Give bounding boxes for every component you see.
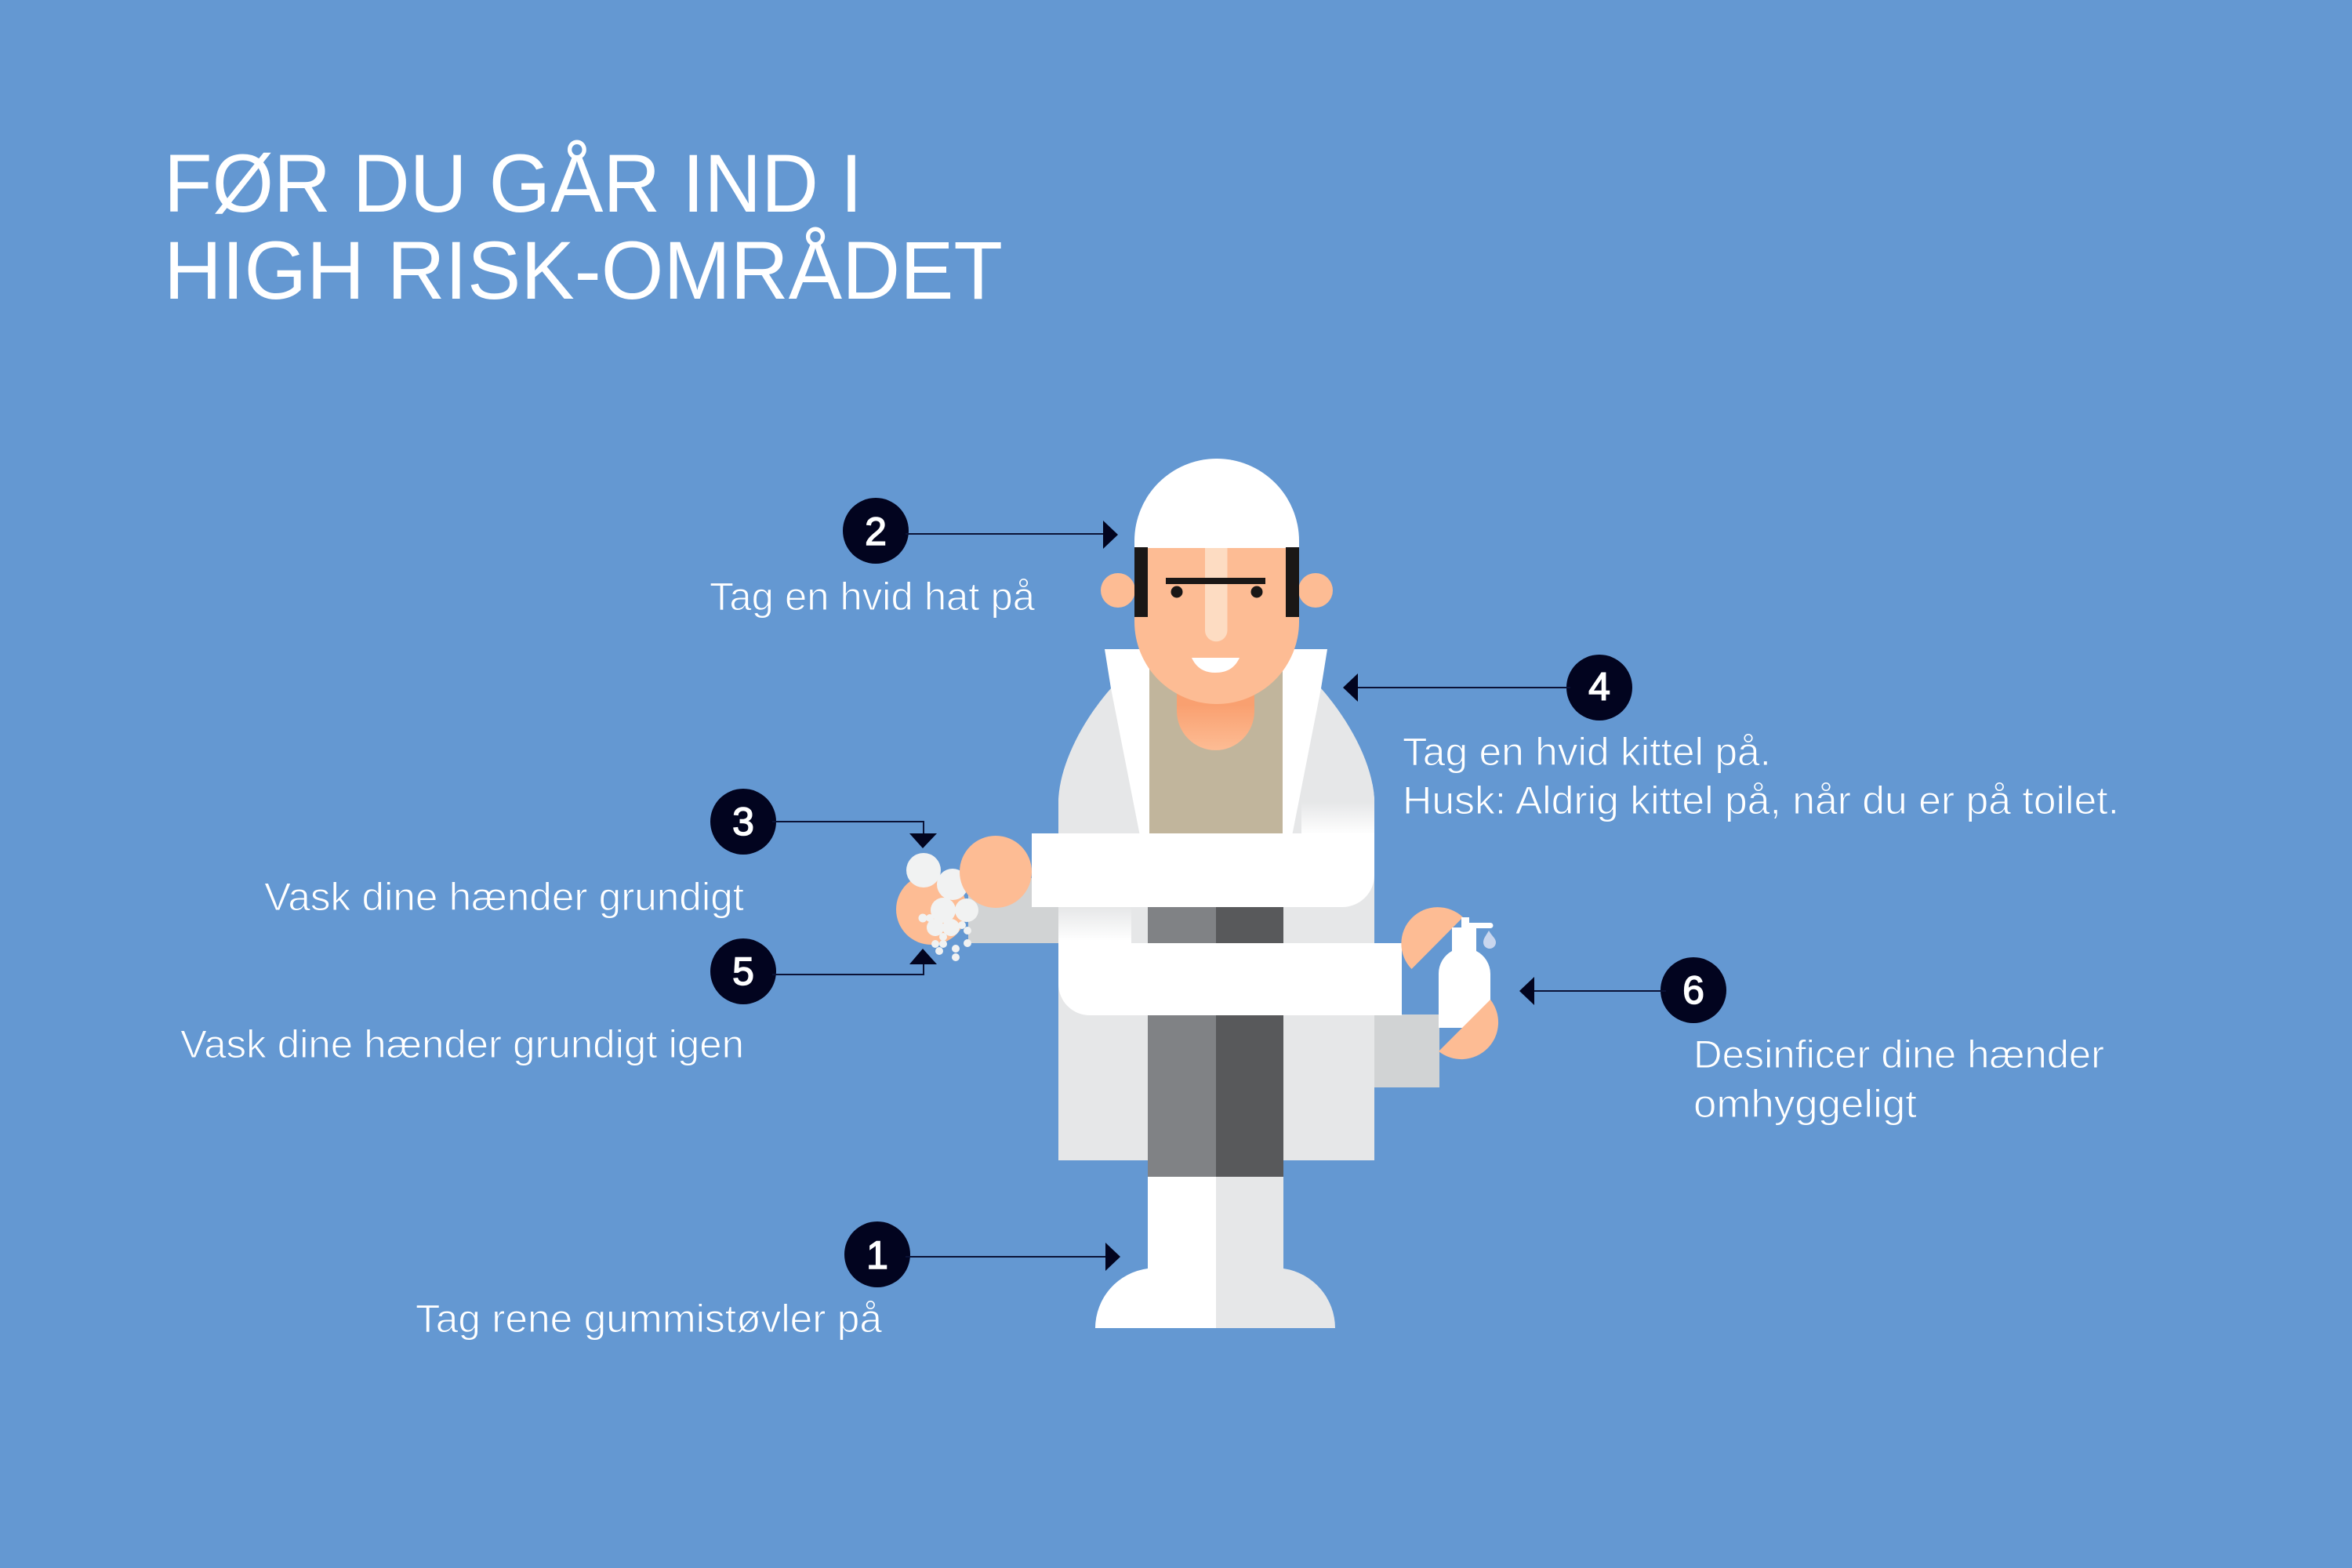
coat highlight between arms: [1058, 907, 1131, 945]
right sleeve: [1374, 1014, 1439, 1087]
smile: [1192, 658, 1240, 673]
title: HIGH RISK-OMRÅDET: [164, 225, 1003, 317]
collar lapels: [1105, 649, 1327, 836]
neck: [1177, 690, 1254, 750]
step 6 callout: Desinficer dine hænder: [1693, 1033, 2104, 1076]
step 4 callout: Tag en hvid kittel på.: [1403, 730, 1771, 774]
lab coat body: [1058, 688, 1374, 1160]
title: [164, 138, 1003, 317]
face: [1134, 547, 1299, 704]
hat: [1134, 459, 1299, 548]
lower arm: [1058, 943, 1402, 1015]
trousers: [1148, 902, 1283, 1177]
step 1 callout: 1: [866, 1233, 888, 1277]
step 4 callout: Husk: Aldrig kittel på, når du er på toilet.: [1403, 779, 2119, 822]
step 5 callout: Vask dine hænder grundigt igen: [180, 1022, 744, 1066]
coat highlight right: [1301, 784, 1374, 835]
character: hygiene worker: [896, 459, 1498, 1328]
step 4 callout: [1343, 655, 2119, 822]
step 3 callout: 3: [732, 800, 754, 844]
shirt: [1149, 666, 1283, 835]
step 3 callout: [264, 789, 937, 919]
step 6 callout: 6: [1682, 968, 1704, 1012]
step 1 callout: [416, 1221, 1120, 1341]
hand holding bottle bottom: [1439, 1000, 1498, 1059]
left sleeve: [968, 878, 1058, 943]
upper hand: [960, 836, 1032, 908]
step 1 callout: Tag rene gummistøvler på: [416, 1297, 882, 1341]
eyebrow: [1166, 578, 1265, 584]
step 2 callout: 2: [865, 510, 887, 554]
boots: [1095, 1176, 1335, 1328]
eyes: [1171, 586, 1262, 597]
sanitiser bottle: [1439, 917, 1496, 1028]
hand holding bottle top: [1401, 907, 1463, 969]
nose: [1205, 548, 1228, 641]
washing hand: [896, 874, 967, 945]
soap bubbles: [906, 853, 978, 961]
upper arm: [1032, 833, 1374, 907]
step 5 callout: 5: [732, 949, 754, 993]
step 6 callout: [1519, 957, 2104, 1126]
drop: [1483, 931, 1496, 949]
sideburns: [1134, 547, 1299, 617]
step 3 callout: Vask dine hænder grundigt: [264, 875, 744, 919]
step 2 callout: Tag en hvid hat på: [710, 575, 1035, 619]
ears: [1101, 573, 1333, 608]
step 5 callout: [180, 938, 937, 1066]
title: FØR DU GÅR IND I: [164, 138, 862, 230]
step 4 callout: 4: [1588, 665, 1610, 709]
step 2 callout: [710, 498, 1118, 619]
step 6 callout: omhyggeligt: [1693, 1082, 1917, 1126]
